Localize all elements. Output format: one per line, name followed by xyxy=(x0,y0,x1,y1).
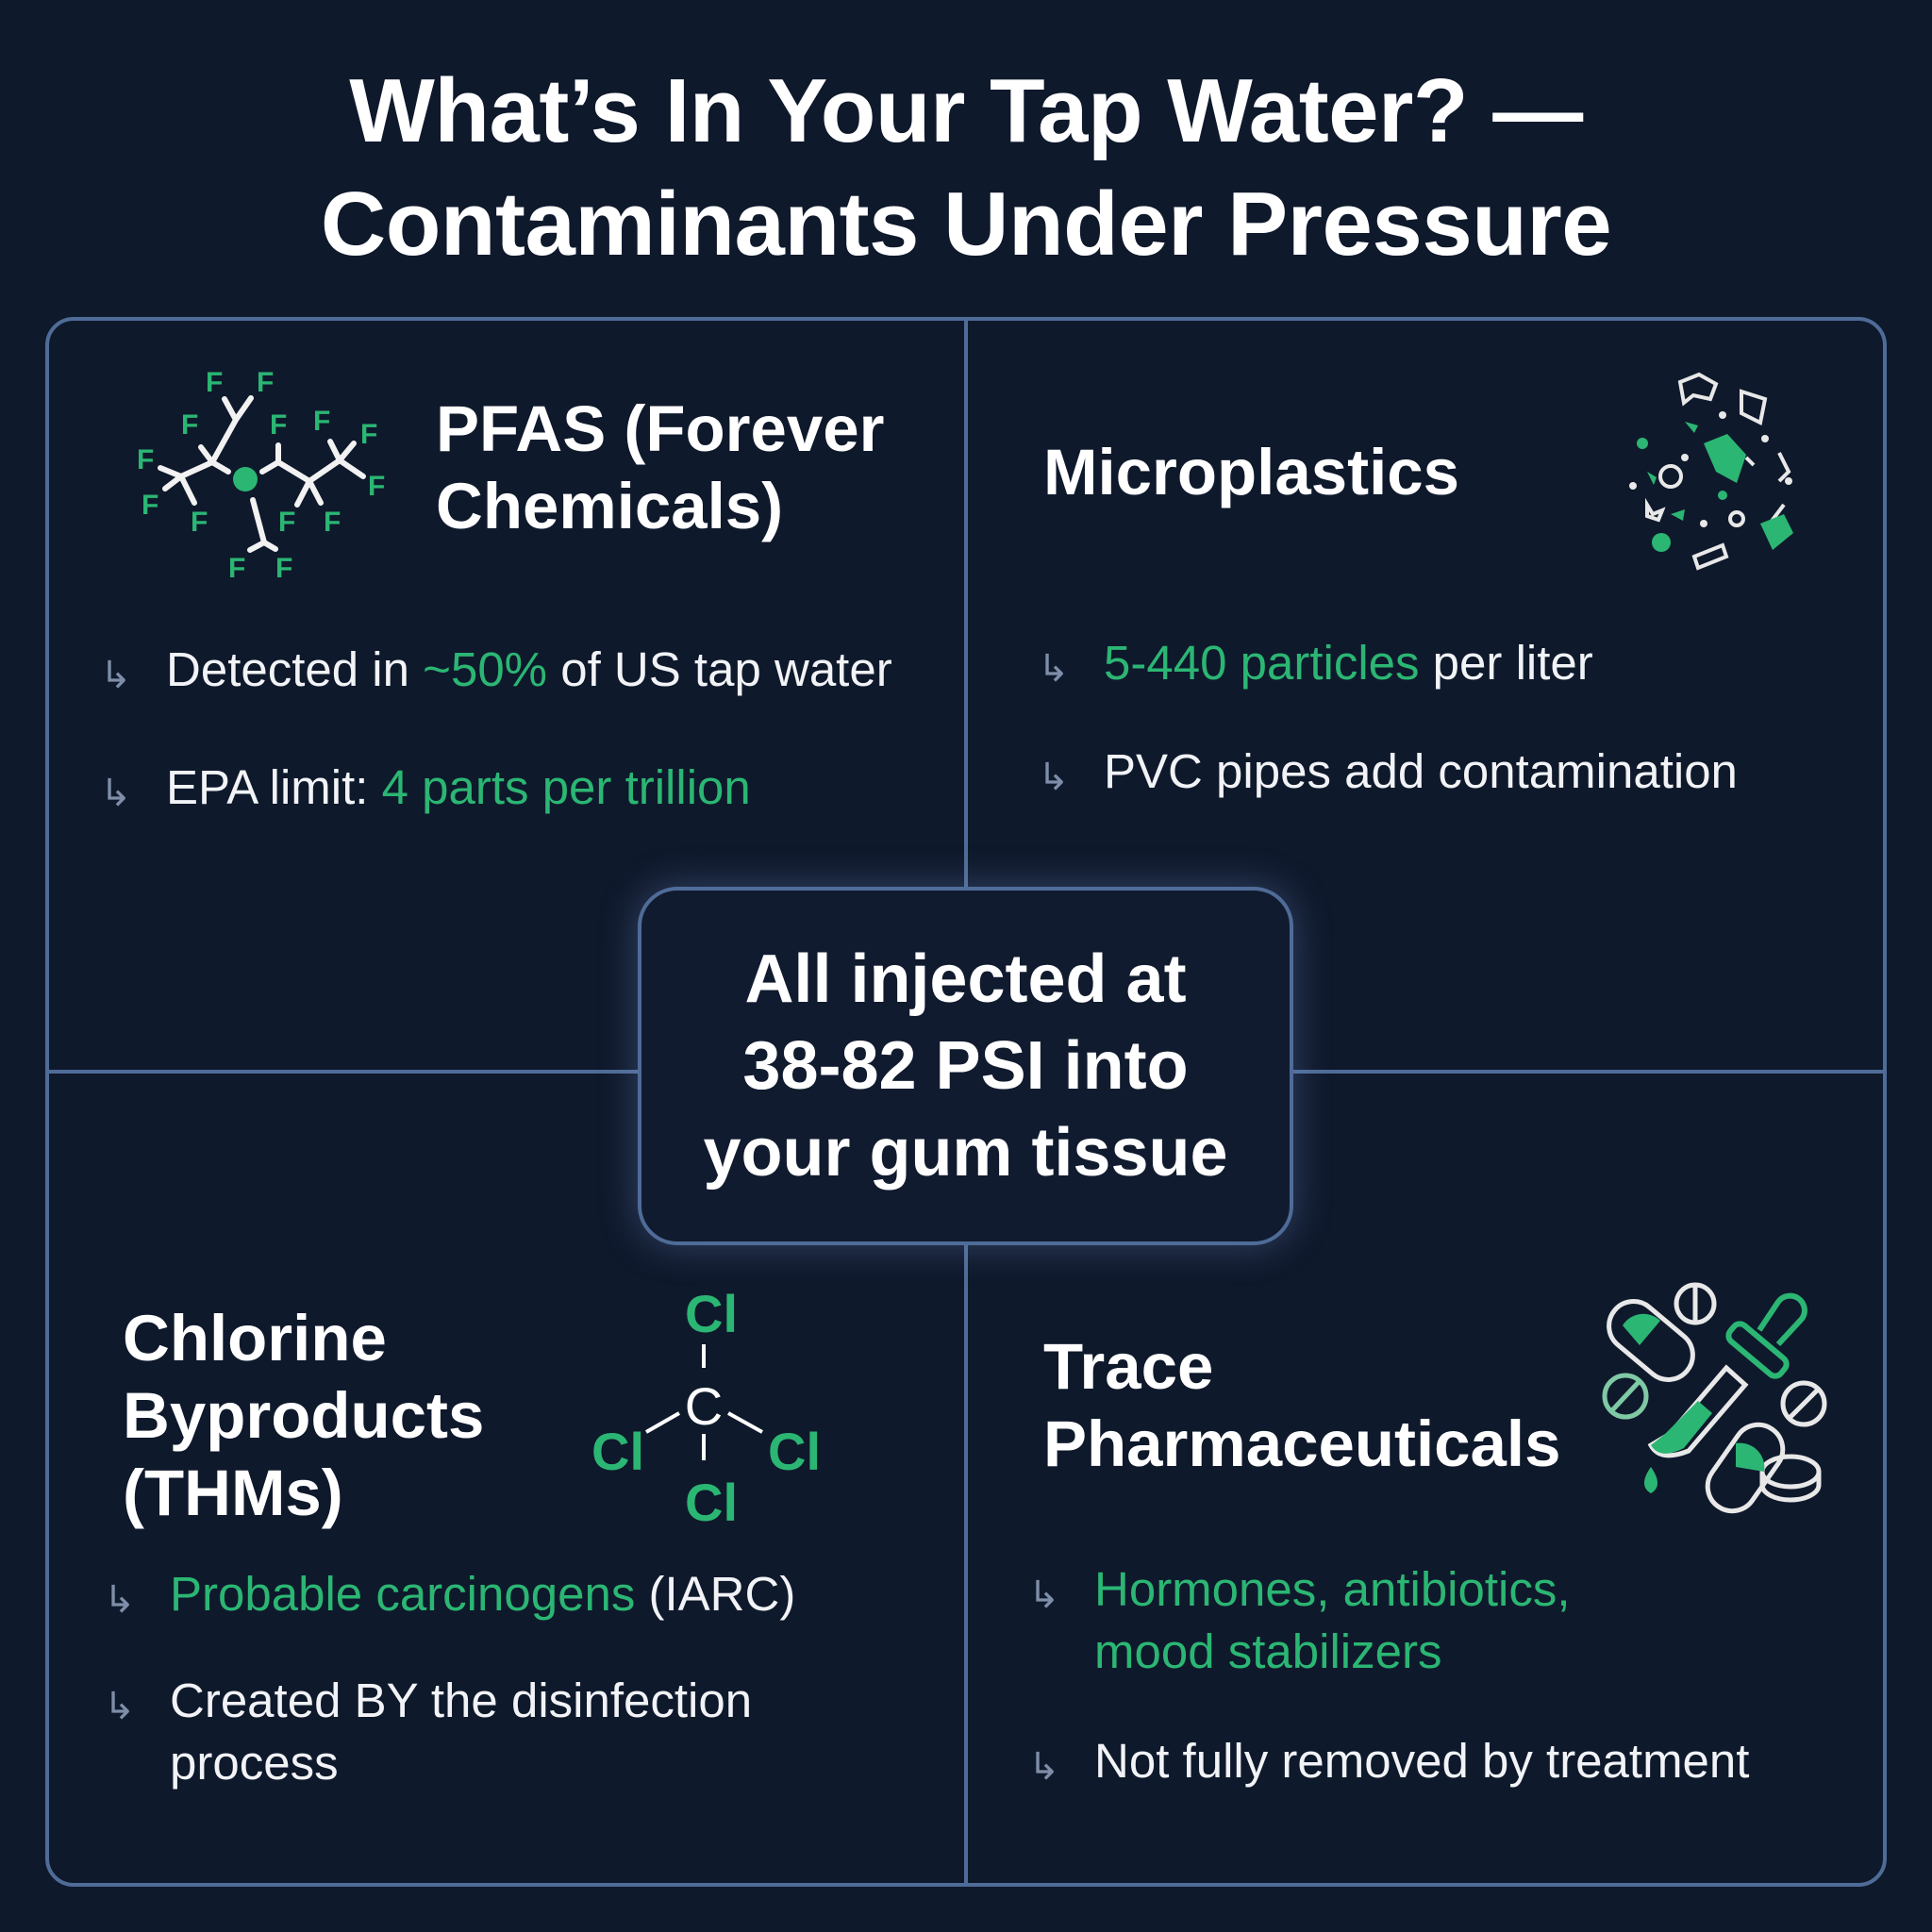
icon: PFAS molecule xyxy=(137,367,385,584)
icon: pills and dropper xyxy=(1602,1283,1826,1513)
heading: PFAS: PFAS (Forever xyxy=(436,392,885,465)
heading: Chlorine: Chlorine xyxy=(123,1302,387,1374)
icon: PFAS molecule: F xyxy=(137,444,154,475)
panel: PFAS xyxy=(100,367,892,814)
bullet: EPA limit: EPA limit: 4 parts per trillion xyxy=(166,760,751,814)
heading: Trace Pharmaceuticals: Trace xyxy=(1043,1330,1213,1403)
icon: PFAS molecule: F xyxy=(191,507,208,538)
icon: PFAS molecule: F xyxy=(181,409,198,441)
icon: chloroform molecule: Cl xyxy=(768,1422,821,1481)
panel: Microplastics: ↳ xyxy=(1038,757,1070,798)
panel: Chlorine byproducts: ↳ xyxy=(104,1686,136,1727)
bullet: hormones: Hormones, antibiotics, xyxy=(1094,1562,1571,1616)
callout: center pressure box xyxy=(638,887,1293,1245)
panel: Chlorine byproducts: ↳ xyxy=(104,1579,136,1621)
heading: Trace Pharmaceuticals xyxy=(1043,1330,1560,1480)
icon: chloroform molecule: Cl xyxy=(685,1473,738,1532)
icon: chloroform molecule: Cl xyxy=(591,1422,644,1481)
bullet: created by: process xyxy=(170,1736,339,1790)
icon: PFAS molecule: F xyxy=(324,507,341,538)
title: Contaminants Under Pressure xyxy=(321,174,1611,275)
title xyxy=(321,60,1611,275)
bullet: hormones xyxy=(1028,1562,1571,1678)
panel: Chlorine byproducts xyxy=(104,1284,821,1790)
heading: Microplastics: Microplastics xyxy=(1043,436,1459,508)
callout: center pressure box: 38-82 PSI into xyxy=(742,1028,1189,1104)
icon: PFAS molecule: F xyxy=(368,471,385,502)
callout: center pressure box: your gum tissue xyxy=(703,1115,1228,1191)
icon: PFAS molecule: F xyxy=(360,419,377,450)
heading: PFAS: Chemicals) xyxy=(436,470,783,542)
icon: microplastic particles xyxy=(1629,372,1793,571)
bullet: not removed: Not fully removed by treatment xyxy=(1094,1734,1749,1788)
icon: PFAS molecule: F xyxy=(228,553,245,584)
bullet: detected: Detected in ~50% of US tap water xyxy=(166,642,892,696)
icon: chloroform molecule: Cl xyxy=(685,1284,738,1343)
panel: PFAS: ↳ xyxy=(100,773,132,814)
heading: Chlorine: (THMs) xyxy=(123,1457,343,1529)
bullet: carcinogens: Probable carcinogens (IARC) xyxy=(170,1567,795,1621)
heading: PFAS xyxy=(436,392,885,542)
bullet: created by: Created BY the disinfection xyxy=(170,1674,752,1727)
panel: Trace Pharmaceuticals xyxy=(1028,1283,1826,1788)
icon: PFAS molecule: F xyxy=(206,367,223,398)
icon: PFAS molecule: F xyxy=(142,490,158,521)
heading: Chlorine: Byproducts xyxy=(123,1379,484,1452)
icon: PFAS molecule: F xyxy=(313,406,330,437)
panel: Trace Pharmaceuticals: ↳ xyxy=(1028,1746,1060,1788)
bullet: hormones: mood stabilizers xyxy=(1094,1624,1441,1678)
bullet: created by xyxy=(104,1674,752,1790)
panel: Microplastics xyxy=(1038,372,1793,798)
bullet: PVC: PVC pipes add contamination xyxy=(1104,744,1738,798)
title: What’s In Your Tap Water? — xyxy=(349,60,1583,161)
panel: Trace Pharmaceuticals: ↳ xyxy=(1028,1574,1060,1616)
callout: center pressure box: All injected at xyxy=(744,941,1187,1017)
icon: PFAS molecule: F xyxy=(270,409,287,441)
panel: PFAS: ↳ xyxy=(100,655,132,696)
icon: PFAS molecule: F xyxy=(257,367,274,398)
icon: PFAS molecule: F xyxy=(275,553,292,584)
bullet: particles: 5-440 particles per liter xyxy=(1104,636,1593,690)
icon: chloroform molecule xyxy=(591,1284,821,1532)
heading: Chlorine xyxy=(123,1302,484,1529)
heading: Trace Pharmaceuticals: Pharmaceuticals xyxy=(1043,1407,1560,1480)
icon: chloroform molecule: C xyxy=(685,1376,723,1436)
icon: PFAS molecule: F xyxy=(278,507,295,538)
panel: Microplastics: ↳ xyxy=(1038,648,1070,690)
